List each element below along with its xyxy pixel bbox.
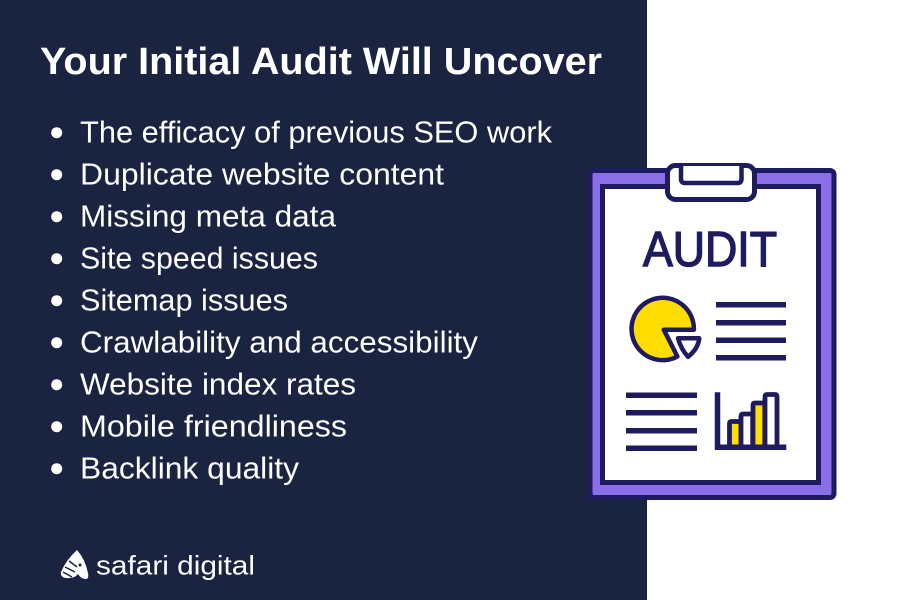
title: Your Initial Audit Will Uncover — [40, 41, 602, 83]
bullet list — [51, 115, 552, 486]
clipboard paper — [602, 186, 818, 482]
text lines bottom left — [626, 392, 697, 451]
list item: duplicate content: Duplicate website content — [80, 157, 444, 192]
clipboard clip — [668, 166, 754, 200]
list item: backlink: Backlink quality — [80, 451, 300, 486]
audit label: AUDIT — [643, 223, 777, 277]
list item: sitemap: Sitemap issues — [80, 283, 288, 318]
panel: dark background — [0, 0, 647, 600]
logo wordmark: safari digital — [96, 550, 255, 580]
logo: safari digital — [61, 550, 255, 580]
clipboard board — [590, 170, 834, 498]
list item: previous SEO work: The efficacy of previous SEO work — [80, 115, 552, 150]
bar chart — [718, 392, 786, 447]
pie chart — [632, 298, 699, 360]
list item: meta data: Missing meta data — [80, 199, 337, 234]
list item: crawlability: Crawlability and accessibility — [80, 325, 478, 360]
icon: audit clipboard — [590, 166, 834, 498]
icon: zebra head — [61, 550, 88, 579]
text lines top right — [716, 302, 786, 360]
list item: index rates: Website index rates — [80, 367, 356, 402]
list item: mobile: Mobile friendliness — [80, 409, 347, 444]
list item: site speed: Site speed issues — [80, 241, 318, 276]
